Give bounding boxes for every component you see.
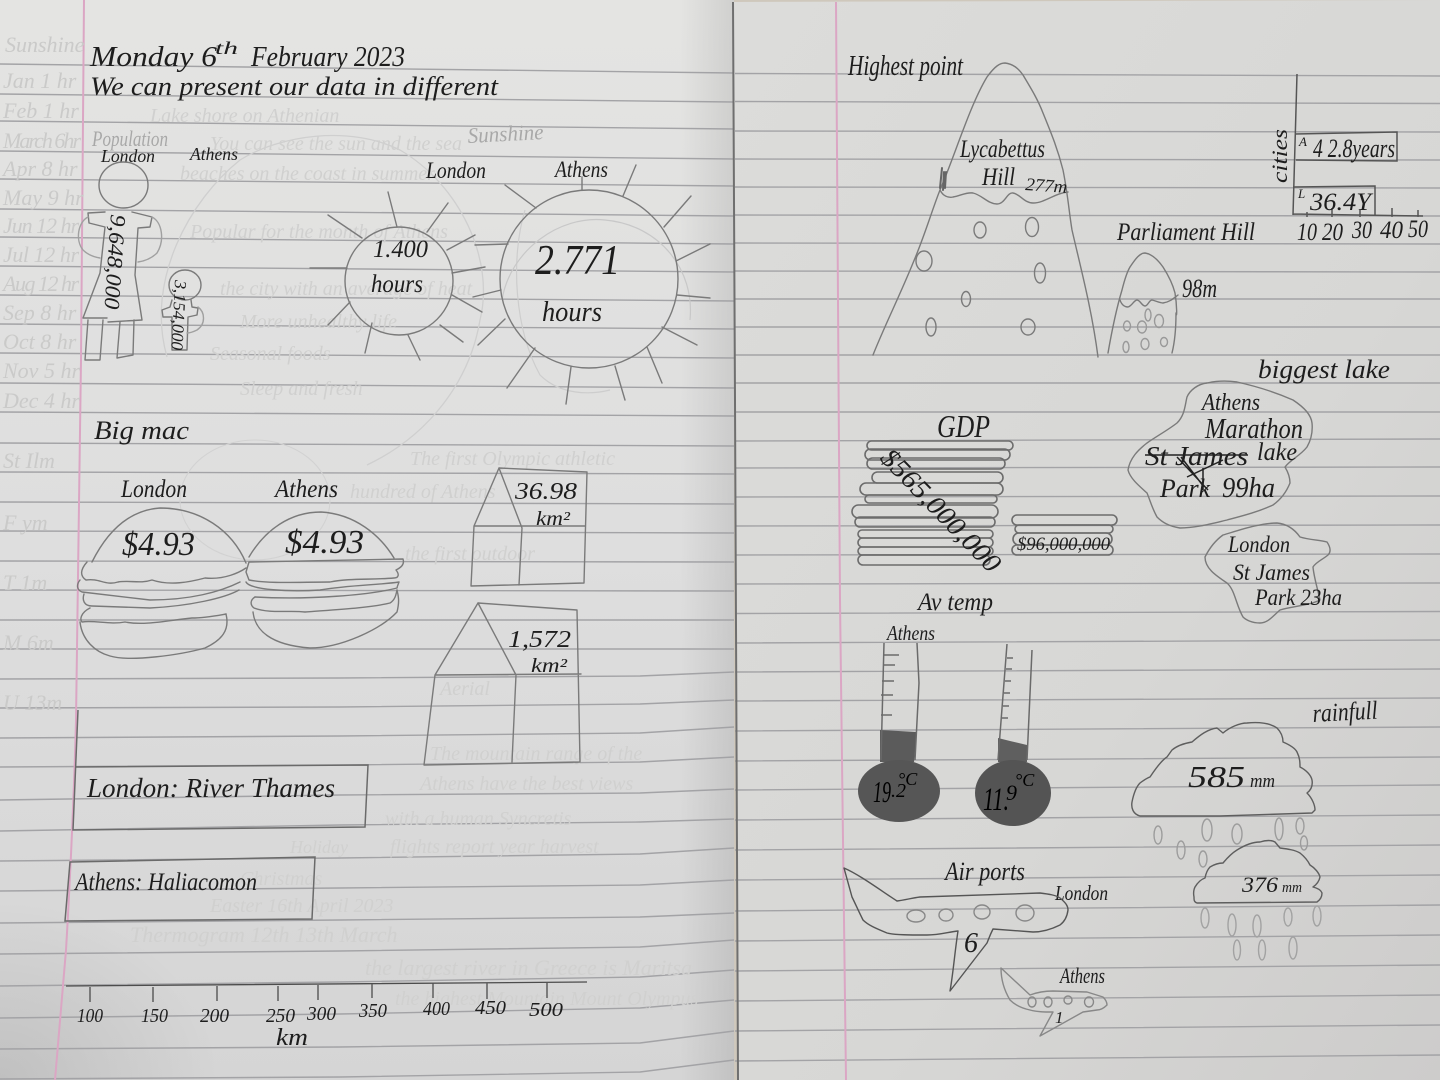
London temperature value [983, 770, 1035, 818]
show-through writing from the reverse of the page: March 6hr [2, 128, 81, 153]
London area value: km² [536, 508, 571, 530]
chart tick labels: 30 [1351, 217, 1372, 244]
show-through writing from the reverse of the page: the first outdoor [405, 543, 535, 565]
panel: longest river bars [65, 710, 587, 1051]
city labels: London [100, 146, 155, 166]
icon: Lycabettus mountain [873, 63, 1098, 357]
Athens rainfall value: mm [1250, 771, 1275, 792]
Parliament Hill height: 98m [1182, 274, 1217, 303]
Athens sunshine value: 2.771 [535, 238, 620, 284]
show-through writing from the reverse of the page: Apr 8 hr [1, 156, 78, 181]
panel: Big Mac price [78, 416, 403, 658]
Athens lake label: Marathon [1204, 414, 1303, 445]
airports heading: Air ports [943, 857, 1025, 886]
show-through writing from the reverse of the page: Holiday [289, 837, 348, 857]
show-through writing from the reverse of the page: May 9 hr [2, 185, 84, 210]
sun city labels: Athens [553, 157, 608, 182]
sunshine heading: Sunshine [467, 119, 544, 148]
Lycabettus label: Lycabettus [959, 136, 1045, 163]
title [89, 38, 499, 101]
London bar label: L [1297, 186, 1305, 201]
show-through writing from the reverse of the page: More unhealthy life [239, 311, 397, 333]
river length axis: 250 [266, 1005, 295, 1027]
Athens rainfall value [1188, 759, 1275, 794]
London river bar [73, 710, 368, 830]
show-through writing from the reverse of the page: Jul 12 hr [3, 242, 79, 267]
show-through writing from the reverse of the page: Easter 16th April 2023 [209, 895, 394, 917]
Athens lake label: St James [1145, 441, 1248, 471]
show-through writing from the reverse of the page: The first Olympic athletic [410, 448, 615, 470]
London temperature value: 9 [1006, 780, 1017, 805]
icon: Athens lake outline [1128, 381, 1312, 528]
river length axis: 450 [475, 997, 506, 1019]
London lake label: Park 23ha [1254, 585, 1342, 610]
Lycabettus label: 277m [1025, 174, 1068, 197]
show-through writing from the reverse of the page: Popular for the month of Athens [189, 221, 448, 243]
icon: London thermometer [975, 644, 1051, 826]
icon: London figure [78, 162, 162, 360]
show-through writing from the reverse of the page: M 6m [2, 630, 54, 655]
panel: rainfall clouds [1132, 696, 1378, 960]
Athens area value [508, 627, 571, 677]
Athens temperature value: 19 [873, 774, 891, 809]
show-through writing from the reverse of the page: U 13m [3, 690, 62, 715]
panel: sunshine comparison: hours [542, 296, 602, 328]
panel: sunshine comparison [310, 119, 710, 404]
show-through writing from the reverse of the page: Lake shore on Athenian [149, 105, 339, 127]
Lycabettus label [959, 136, 1068, 197]
icon: Athens house [424, 603, 581, 765]
Athens GDP value: $565,000,000 [875, 442, 1008, 579]
Athens river bar: Athens: Haliacomon [73, 869, 257, 896]
Athens airport label: Athens [1058, 963, 1105, 988]
icon: London rain cloud [1194, 840, 1322, 960]
title: Monday 6 [89, 42, 217, 73]
Athens bar label: A [1298, 134, 1307, 149]
sun city labels [425, 157, 608, 183]
Big Mac heading: Big mac [94, 416, 190, 445]
London area value [514, 479, 577, 530]
panel: highest point [847, 51, 1255, 357]
show-through writing from the reverse of the page: Nov 5 hr [2, 358, 80, 383]
thermometer city label: Athens [885, 621, 935, 645]
Athens bar label [1298, 134, 1395, 163]
river length axis: 350 [358, 1000, 387, 1022]
icon: Parliament Hill [1108, 253, 1178, 353]
show-through writing from the reverse of the page: The mountain range of the [430, 743, 642, 765]
show-through writing from the reverse of the page: with a human Syncretis [385, 808, 572, 830]
chart axes and bars [1293, 74, 1423, 217]
chart tick labels: 50 [1408, 216, 1428, 243]
show-through writing from the reverse of the page: Seasonal foods [210, 343, 331, 365]
Athens airport count: 1 [1055, 1008, 1064, 1027]
show-through writing from the reverse of the page: Sunshine [5, 32, 85, 57]
icon: Athens sun [473, 165, 710, 404]
show-through writing from the reverse of the page: Sep 8 hr [3, 300, 77, 325]
river length axis: 200 [200, 1005, 229, 1027]
Athens lake label: lake [1257, 439, 1297, 466]
chart tick labels: 20 [1322, 219, 1343, 246]
Athens temperature value [873, 769, 918, 809]
London river bar: London: River Thames [86, 773, 335, 803]
icon: Athens rain cloud [1132, 723, 1315, 867]
Big Mac city labels: London [120, 476, 187, 503]
London rainfall value: mm [1282, 880, 1302, 896]
icon: London sun [310, 192, 485, 360]
show-through writing from the reverse of the page: the largest river in Greece is Maritsa [365, 955, 692, 980]
show-through writing from the reverse of the page: T 1m [3, 570, 47, 595]
panel: GDP coin stacks [852, 408, 1117, 579]
temperature heading: Av temp [916, 589, 993, 616]
Parliament Hill label: Parliament Hill [1116, 219, 1255, 246]
Athens river bar [65, 857, 315, 921]
title: February 2023 [250, 42, 405, 73]
panel: population pictogram [78, 126, 238, 360]
London lake label: London [1227, 532, 1290, 557]
London sunshine value: hours [371, 271, 423, 298]
London area value: 36.98 [514, 479, 577, 505]
Athens temperature value: .2 [891, 780, 906, 802]
London airport count: 6 [964, 928, 978, 959]
Athens population value: 3,154,000 [167, 279, 190, 351]
river length axis: 150 [141, 1005, 168, 1027]
population heading: Population [91, 126, 168, 151]
panel: average temperature thermometers [858, 589, 1051, 826]
show-through writing from the reverse of the page: Jun 12 hr [3, 213, 79, 238]
Lycabettus label: Hill [981, 164, 1015, 191]
show-through writing from the reverse of the page: You can see the sun and the sea [210, 133, 462, 155]
London bar label: 36.4Y [1309, 189, 1374, 216]
Big Mac city labels: Athens [273, 476, 338, 503]
icon: London short stack [1012, 515, 1117, 555]
London bar label [1297, 186, 1374, 216]
show-through writing from the reverse of the page: Jan 1 hr [3, 68, 77, 93]
Athens burger price: $4.93 [285, 524, 364, 561]
river length axis [66, 982, 587, 1051]
show-through writing from the reverse of the page: hundred of Athens [350, 481, 496, 503]
panel: biggest lake [1128, 355, 1390, 623]
icon: London burger [78, 508, 246, 658]
show-through writing from the reverse of the page: the city with an average of heat [220, 278, 473, 300]
icon: Athens thermometer [858, 643, 940, 822]
London lake label: St James [1233, 560, 1310, 585]
panel: city area houses [424, 468, 587, 765]
show-through writing from the reverse of the page: Sleep and fresh [240, 378, 363, 400]
title: th [215, 38, 238, 58]
chart tick labels: 40 [1380, 217, 1403, 244]
show-through writing from the reverse of the page: beaches on the coast in summer [180, 163, 435, 185]
river length axis: 400 [423, 998, 450, 1020]
highest point heading: Highest point [847, 51, 964, 82]
show-through writing from the reverse of the page [1, 32, 699, 1010]
show-through writing from the reverse of the page: F ym [2, 510, 48, 535]
show-through writing from the reverse of the page: Thermogram 12th 13th March [130, 922, 397, 947]
show-through writing from the reverse of the page: flights report year harvest [390, 836, 599, 858]
left notebook page [0, 0, 734, 1080]
show-through writing from the reverse of the page: Aerial [438, 678, 490, 700]
London sunshine value [371, 236, 428, 298]
biggest lake heading: biggest lake [1258, 355, 1390, 384]
Big Mac city labels [120, 476, 338, 503]
Athens bar label: 4 2.8years [1313, 134, 1395, 163]
icon: Athens tall stack [852, 441, 1013, 565]
London sunshine value: 1.400 [373, 236, 428, 263]
panel: airports [844, 857, 1108, 1036]
London population value: 9,648,000 [99, 214, 131, 310]
London burger price: $4.93 [122, 526, 195, 563]
show-through writing from the reverse of the page: St Ilm [3, 448, 55, 473]
rainfall heading: rainfull [1312, 696, 1378, 728]
GDP heading: GDP [937, 408, 990, 444]
show-through writing from the reverse of the page: the highest Mountain Mount Olympus [395, 988, 699, 1010]
river length axis: 300 [306, 1003, 336, 1025]
city labels: Athens [189, 144, 238, 164]
icon: London house [471, 468, 587, 586]
show-through writing from the reverse of the page: Dec 4 hr [2, 388, 80, 413]
sun city labels: London [425, 158, 486, 183]
Athens rainfall value: 585 [1188, 759, 1245, 794]
icon: Athens plane [1001, 968, 1107, 1036]
London temperature value: 11. [983, 782, 1009, 818]
Athens lake label [1145, 390, 1303, 504]
show-through writing from the reverse of the page: Oct 8 hr [3, 329, 77, 354]
icon: Athens figure [162, 270, 204, 350]
city labels [100, 144, 238, 166]
London lake label [1227, 532, 1342, 610]
London rainfall value [1241, 872, 1302, 897]
title: We can present our data in different [90, 72, 499, 101]
show-through writing from the reverse of the page: Athens have the best views [418, 773, 633, 795]
Athens lake label: Athens [1200, 390, 1260, 416]
Athens area value: km² [531, 655, 568, 677]
river length axis: 100 [77, 1005, 103, 1027]
Athens lake label: Park [1159, 474, 1210, 503]
show-through writing from the reverse of the page: Feb 1 hr [2, 98, 79, 123]
London airport label: London [1054, 881, 1108, 905]
chart tick labels: 10 [1297, 219, 1317, 246]
icon: Athens burger [246, 512, 403, 648]
show-through writing from the reverse of the page: Christmas [240, 868, 322, 890]
river length axis: km [276, 1025, 308, 1051]
Athens area value: 1,572 [508, 627, 571, 653]
cities axis label: cities [1267, 129, 1292, 183]
icon: London lake outline [1205, 523, 1330, 623]
river length axis: 500 [529, 999, 563, 1021]
right notebook page [733, 0, 1440, 1080]
London rainfall value: 376 [1241, 872, 1278, 897]
Athens temperature value: °C [898, 769, 918, 789]
chart tick labels [1297, 216, 1428, 246]
show-through writing from the reverse of the page: Aug 12 hr [1, 271, 79, 296]
London temperature value: °C [1015, 770, 1035, 790]
panel: life expectancy bar chart [1267, 74, 1428, 246]
London GDP value: $96,000,000 [1017, 534, 1110, 555]
Athens lake label: 99ha [1222, 473, 1275, 504]
icon: London plane [844, 868, 1068, 991]
